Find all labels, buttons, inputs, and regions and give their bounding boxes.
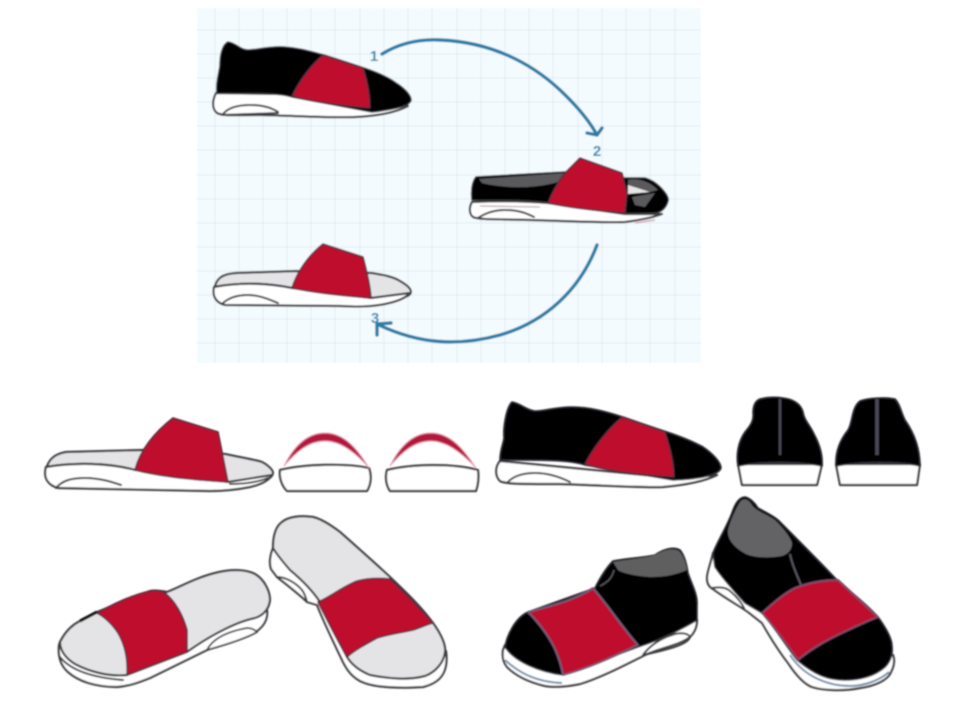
arrow from step 2 to step 3 [377,245,597,342]
illustration: shoe three-quarter left [503,548,697,687]
red strap [318,578,433,657]
row: slide views [45,397,920,491]
illustration: closed shoe side view [496,402,721,487]
illustration: shoe three-quarter right [707,497,894,690]
red arch [390,433,476,468]
arrow from step 1 to step 2 [382,40,602,135]
illustration: slide front view 2 [386,433,478,491]
row: perspective views [59,497,894,690]
panel: grid paper conversion diagram [197,8,701,363]
illustration: slide front view 1 [280,433,371,491]
illustration: closed shoe back view 2 [836,398,920,485]
gray collar [613,549,687,577]
gray lining [479,173,565,187]
illustration: slide three-quarter right [270,516,447,688]
illustration: slide side view [45,418,273,491]
label: step 1: 1 [370,48,378,65]
red arch [284,433,369,468]
red strap [585,417,674,477]
arch cutout [207,628,257,650]
illustration: slide three-quarter left [59,570,270,687]
red strap [135,418,228,482]
red strap [292,55,370,108]
gray collar [728,499,792,557]
label: step 2: 2 [593,143,601,160]
illustration: step 1 closed shoe [213,42,411,117]
illustration: closed shoe back view 1 [737,397,822,485]
red strap [292,244,371,298]
red panel [528,588,638,675]
illustration: step 3 finished slide [213,244,411,307]
red strap [97,591,187,675]
illustration: step 2 shoe being cut [470,158,668,223]
label: step 3: 3 [371,310,379,327]
toe lining [628,179,658,192]
red panel [762,580,878,660]
red strap [548,158,627,213]
